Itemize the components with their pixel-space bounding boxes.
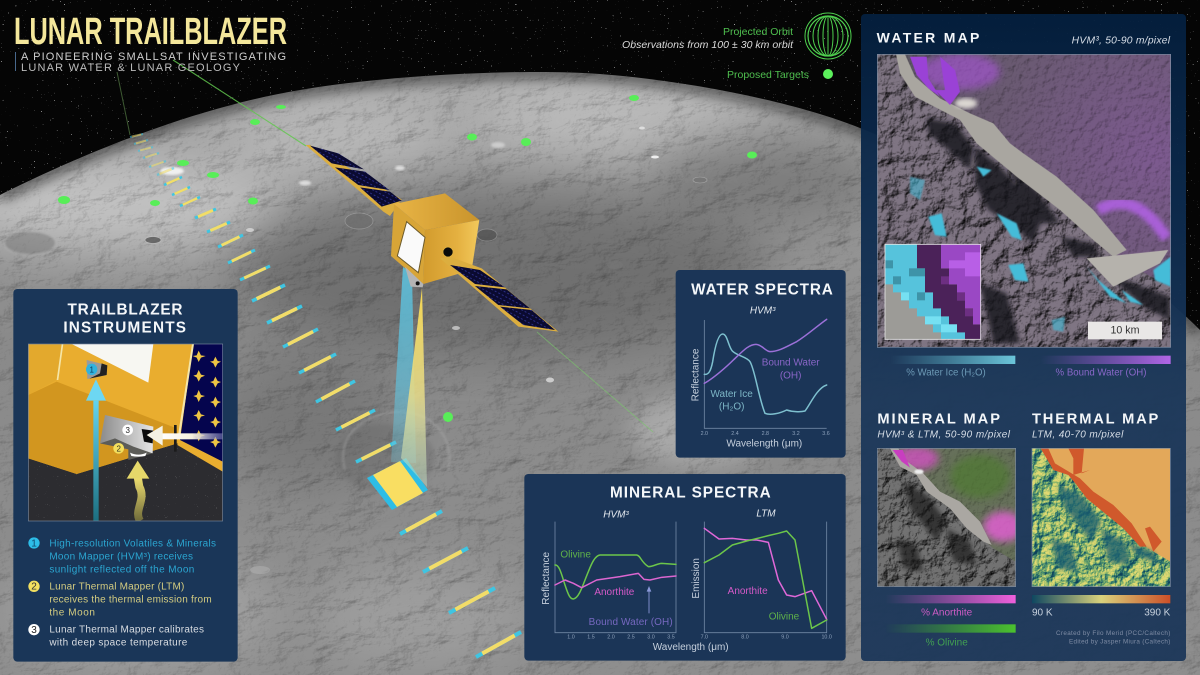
heading bbox=[63, 301, 186, 336]
craters bbox=[4, 126, 707, 574]
limb shading along horizon bbox=[0, 72, 1200, 330]
left solar array bbox=[306, 145, 402, 216]
icon: orbit globe bbox=[805, 13, 851, 59]
chart: water spectra: Reflectance bbox=[691, 348, 702, 401]
orbit track lines bbox=[117, 60, 653, 432]
rocky terrain bbox=[877, 54, 1171, 347]
observation footprint rectangle bbox=[367, 458, 428, 510]
panel: trailblazer instruments bbox=[13, 289, 238, 662]
thermal map heading bbox=[1032, 411, 1159, 441]
credits bbox=[1056, 630, 1170, 645]
instrument badges: 2 bbox=[116, 444, 121, 453]
cyan water ice deposits bbox=[910, 167, 1171, 332]
chart: water spectra: 2.0 bbox=[701, 431, 708, 437]
purple crater rim bbox=[910, 57, 960, 105]
arrow: thermal emission bbox=[127, 461, 149, 521]
legend item 3: Lunar Thermal Mapper calibrates bbox=[49, 625, 204, 636]
chart: LTM mineral emission bbox=[691, 522, 832, 640]
orbit and target key: Observations from 100 ± 30 km orbit bbox=[622, 39, 794, 51]
instrument beams bbox=[391, 267, 427, 487]
chart: HVM3 mineral reflectance: 3.5 bbox=[667, 634, 675, 640]
chart: LTM mineral emission: Olivine bbox=[769, 611, 800, 622]
heading: INSTRUMENTS bbox=[63, 319, 186, 336]
chart: water spectra: Bound Water bbox=[762, 358, 820, 369]
legend item 1 bbox=[28, 537, 216, 575]
thermal map image bbox=[1032, 448, 1170, 587]
chart: LTM mineral emission: 10.0 bbox=[821, 634, 832, 640]
instrument LTM box bbox=[100, 415, 153, 460]
legend: temperature: 90 K bbox=[1032, 608, 1053, 619]
legend: temperature: 390 K bbox=[1144, 608, 1171, 619]
chart: HVM3 mineral reflectance: 1.0 bbox=[567, 634, 575, 640]
panel: mineral spectra bbox=[524, 474, 846, 661]
title: LUNAR WATER & LUNAR GEOLOGY bbox=[21, 62, 241, 74]
water map section bbox=[877, 29, 1171, 379]
water map image bbox=[877, 53, 1171, 347]
mineral map image bbox=[877, 447, 1023, 587]
panel: water spectra and mineral spectra bbox=[524, 270, 846, 661]
chart: HVM3 mineral reflectance: Bound Water (OH) bbox=[589, 617, 673, 628]
chart: HVM3 mineral reflectance: Anorthite bbox=[594, 587, 635, 598]
chart: water spectra: 3.6 bbox=[822, 431, 830, 437]
legend item 3 bbox=[28, 624, 204, 649]
legend: olivine: % Olivine bbox=[926, 637, 968, 648]
orbit and target key bbox=[622, 13, 851, 81]
instruments illustration bbox=[28, 344, 223, 521]
legend: anorthite bbox=[885, 595, 1016, 619]
panel: maps bbox=[861, 14, 1186, 661]
chart: HVM3 mineral reflectance: 1.5 bbox=[587, 634, 595, 640]
legend: water ice: % Water Ice (H₂O) bbox=[906, 368, 986, 379]
mineral map heading bbox=[877, 411, 1011, 441]
chart: water spectra bbox=[691, 319, 830, 450]
chart: HVM3 mineral reflectance: 2.5 bbox=[627, 634, 635, 640]
legend: olivine bbox=[885, 624, 1016, 648]
spacecraft bbox=[306, 145, 558, 332]
chart: LTM mineral emission: 7.0 bbox=[701, 634, 708, 640]
heading: MINERAL SPECTRA bbox=[610, 485, 771, 502]
chart: water spectra: 2.4 bbox=[731, 431, 739, 437]
water map section: HVM³, 50-90 m/pixel bbox=[1072, 35, 1171, 46]
light band of crater floor bbox=[896, 54, 1127, 257]
panel: water spectra bbox=[676, 270, 846, 458]
orbit and target key: Proposed Targets bbox=[727, 69, 809, 81]
chart: HVM3 mineral reflectance: 3.0 bbox=[647, 634, 655, 640]
chart: LTM mineral emission: 9.0 bbox=[781, 634, 789, 640]
panel: mineral spectra: HVM³ bbox=[603, 509, 629, 520]
legend: anorthite: % Anorthite bbox=[921, 608, 973, 619]
chart: HVM3 mineral reflectance: Olivine bbox=[560, 549, 591, 560]
solar panel with stars bbox=[177, 344, 223, 472]
scale bar bbox=[1088, 322, 1162, 339]
chart: water spectra: Wavelength (μm) bbox=[726, 439, 802, 450]
chart: LTM mineral emission: Anorthite bbox=[728, 586, 768, 597]
legend: water ice bbox=[890, 356, 1015, 379]
shadowed terrain bbox=[927, 118, 1170, 343]
credits: Edited by Jasper Miura (Caltech) bbox=[1069, 638, 1170, 645]
inset: pixel zoom bbox=[885, 244, 981, 339]
title: LUNAR TRAILBLAZER bbox=[14, 11, 287, 53]
credits: Created by Filo Merid (PCC/Caltech) bbox=[1056, 630, 1170, 637]
thermal map heading: THERMAL MAP bbox=[1032, 411, 1159, 427]
orbit and target key: Projected Orbit bbox=[723, 26, 793, 38]
legend item 1: Moon Mapper (HVM³) receives bbox=[49, 551, 193, 562]
proposed target dots on surface bbox=[58, 95, 757, 422]
mineral map heading: HVM³ & LTM, 50-90 m/pixel bbox=[877, 430, 1011, 441]
title bbox=[14, 11, 287, 74]
chart: water spectra: 3.2 bbox=[792, 431, 800, 437]
scale bar: 10 km bbox=[1110, 325, 1140, 337]
legend item 2: Lunar Thermal Mapper (LTM) bbox=[49, 581, 184, 592]
legend item 2 bbox=[28, 581, 212, 618]
legend item 3: 3 bbox=[31, 625, 37, 636]
legend item 2: receives the thermal emission from bbox=[49, 594, 212, 605]
legend item 1: sunlight reflected off the Moon bbox=[49, 564, 194, 575]
purple highlights bbox=[920, 53, 1167, 238]
mineral and thermal section bbox=[877, 411, 1171, 648]
instrument badges: 3 bbox=[125, 426, 130, 435]
panel: water spectra: HVM³ bbox=[750, 305, 776, 316]
arrow: reflected sunlight bbox=[86, 379, 106, 521]
instrument badges bbox=[86, 364, 133, 454]
chart: water spectra: Water Ice bbox=[710, 389, 753, 400]
heading: WATER SPECTRA bbox=[691, 281, 833, 298]
chart: HVM3 mineral reflectance: 2.0 bbox=[607, 634, 615, 640]
title: A PIONEERING SMALLSAT INVESTIGATING bbox=[21, 51, 286, 63]
legend item 1: High-resolution Volatiles & Minerals bbox=[49, 538, 216, 549]
heading: TRAILBLAZER bbox=[67, 301, 182, 318]
arrow: deep space view bbox=[147, 426, 223, 446]
chart: HVM3 mineral reflectance: Reflectance bbox=[541, 552, 552, 605]
panel: mineral spectra: LTM bbox=[756, 508, 776, 519]
chart: HVM3 mineral reflectance bbox=[541, 522, 676, 640]
chart: water spectra: (OH) bbox=[780, 370, 801, 381]
mineral map heading: MINERAL MAP bbox=[877, 411, 1000, 427]
chart: LTM mineral emission: Emission bbox=[691, 558, 702, 599]
instrument badges: 1 bbox=[89, 365, 94, 374]
legend item 3: with deep space temperature bbox=[48, 638, 188, 649]
chart: water spectra: (H₂O) bbox=[719, 402, 744, 413]
legend: temperature bbox=[1032, 595, 1171, 619]
instrument HVM box bbox=[87, 360, 107, 379]
panel: mineral spectra: Wavelength (μm) bbox=[653, 642, 729, 653]
legend: bound water: % Bound Water (OH) bbox=[1056, 368, 1146, 379]
legend item 2: the Moon bbox=[49, 607, 95, 618]
legend item 2: 2 bbox=[31, 582, 37, 593]
chart: LTM mineral emission: 8.0 bbox=[741, 634, 749, 640]
legend item 1: 1 bbox=[31, 538, 37, 549]
surface shading patches bbox=[0, 85, 890, 665]
chart: water spectra: 2.8 bbox=[762, 431, 769, 437]
footprint strips along ground track bbox=[130, 134, 521, 657]
radiator bbox=[72, 344, 153, 383]
thermal map heading: LTM, 40-70 m/pixel bbox=[1032, 430, 1124, 441]
heading: WATER MAP bbox=[877, 29, 979, 45]
legend: bound water bbox=[1040, 356, 1171, 379]
spacecraft body bbox=[391, 193, 479, 287]
right solar array bbox=[440, 257, 558, 332]
